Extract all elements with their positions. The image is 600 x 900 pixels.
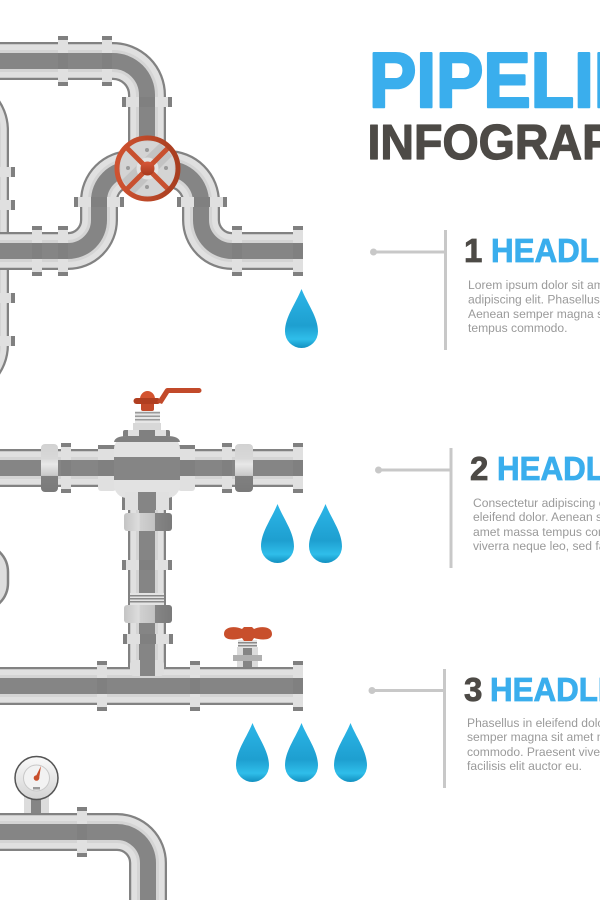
water drop: single bbox=[285, 289, 318, 348]
stem nuts, threads and flanges bbox=[122, 513, 173, 644]
connector 2 bbox=[375, 448, 452, 568]
pipe flange bbox=[77, 807, 87, 857]
stem junction bbox=[130, 660, 164, 676]
pipe: horizontal run bbox=[0, 685, 298, 687]
headline 2: 2 bbox=[470, 450, 488, 487]
pipe: valve bend to outlet bbox=[0, 169, 298, 251]
pipeline 3: lower horizontal pipe bbox=[0, 627, 303, 711]
body text 1: tempus commodo. bbox=[468, 321, 567, 335]
connector 3 bbox=[368, 669, 446, 788]
headline 1: 1 bbox=[464, 232, 482, 269]
pipe: top elbow bbox=[0, 61, 147, 150]
icon: red wheel valve bbox=[117, 138, 178, 199]
icon: pressure gauge bbox=[15, 756, 58, 814]
ball valve body bbox=[114, 423, 180, 510]
pipeline 1: upper pipe network bbox=[0, 36, 303, 379]
section 2 bbox=[375, 448, 600, 568]
pipe: left side capsule bbox=[0, 544, 8, 611]
pipe: vertical stem bbox=[146, 500, 148, 667]
pipe: elbow bbox=[0, 832, 148, 900]
section 1 bbox=[370, 230, 600, 350]
body text 3: facilisis elit auctor eu. bbox=[467, 759, 582, 773]
headline 3: 3 bbox=[464, 671, 482, 708]
pipeline 4: bottom elbow with gauge bbox=[0, 756, 148, 900]
couplers and flanges bbox=[41, 443, 303, 493]
title bbox=[368, 36, 600, 170]
section 3 bbox=[368, 669, 600, 788]
pipe flanges bbox=[97, 661, 303, 711]
pipe: horizontal bbox=[0, 467, 298, 469]
pipeline 2: ball valve tee bbox=[0, 388, 303, 667]
connector 1 bbox=[370, 230, 447, 350]
icon: small red tap bbox=[224, 627, 272, 668]
threaded neck and lever handle bbox=[134, 388, 202, 423]
water drops: pair bbox=[261, 504, 342, 563]
pipe flanges bbox=[0, 36, 303, 346]
water drops: triple bbox=[236, 723, 367, 782]
